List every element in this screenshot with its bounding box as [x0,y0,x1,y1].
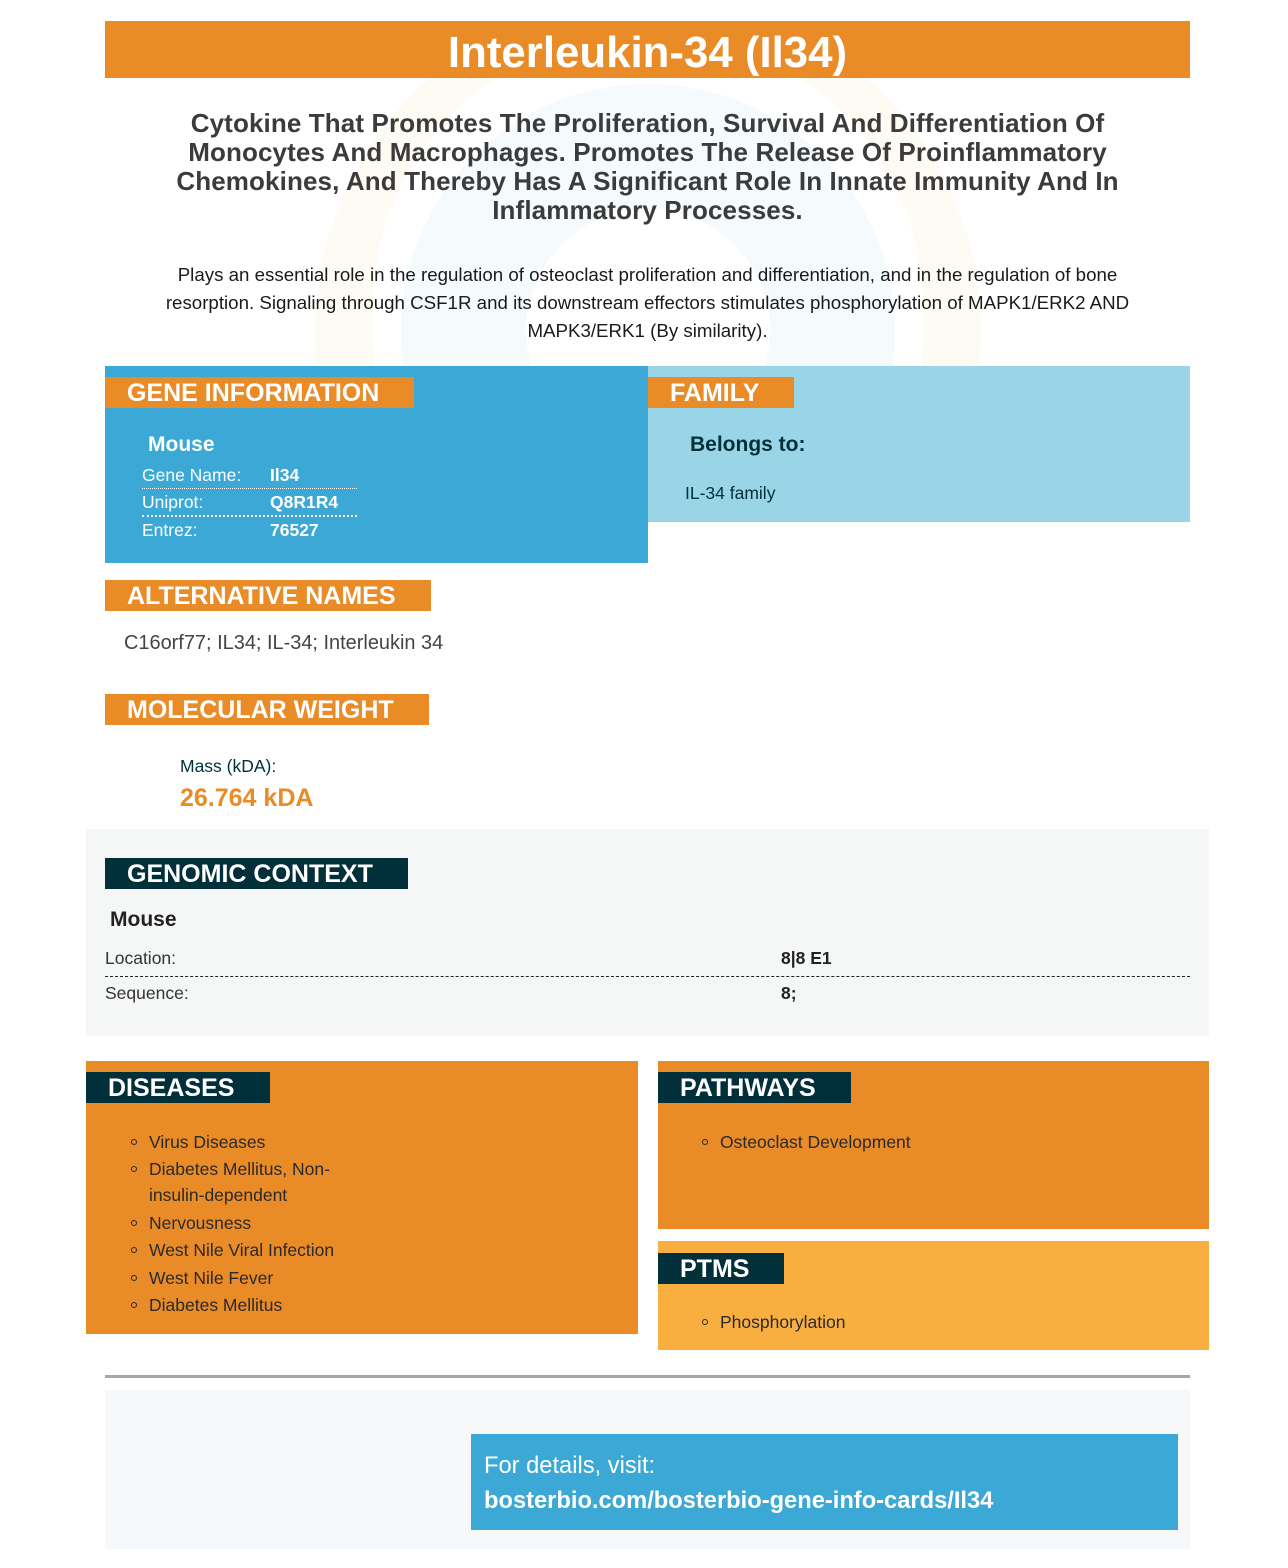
location row: Location: [105,948,176,968]
diseases list: West Nile Fever [149,1268,273,1288]
diseases list: West Nile Viral Infection [149,1240,334,1260]
ptms list: Phosphorylation [720,1312,846,1332]
sequence row: 8; [781,983,797,1003]
gene details table: Il34 [270,465,299,485]
summary heading: Inflammatory Processes. [492,195,803,225]
diseases list [131,1132,334,1315]
panel: family [648,366,1190,522]
heading: alternative names: ALTERNATIVE NAMES [127,582,396,610]
panel: pathways [658,1061,1209,1229]
panel: genomic context [86,829,1209,1036]
gene details table: Entrez: [142,520,197,540]
description text [166,264,1129,341]
description text: resorption. Signaling through CSF1R and its downstream effectors stimulates phosphorylation of MAPK1/ERK2 AND [166,292,1129,313]
gene details table: Q8R1R4 [270,492,338,512]
sequence row: Sequence: [105,983,189,1003]
summary heading: Cytokine That Promotes The Proliferation, Survival And Differentiation Of [191,108,1104,138]
alternative names text: C16orf77; IL34; IL-34; Interleukin 34 [124,632,443,654]
heading: family [648,377,794,408]
callout label: For details, visit: [484,1453,655,1479]
heading: family: FAMILY [670,379,759,407]
heading: gene information: GENE INFORMATION [127,379,379,407]
panel: footer [105,1390,1190,1549]
title banner [105,21,1190,78]
heading: pathways [658,1072,851,1103]
background watermark logo [315,78,981,366]
diseases list: Virus Diseases [149,1132,265,1152]
callout: details link [471,1434,1178,1530]
heading: diseases [86,1072,270,1103]
family value: IL-34 family [685,483,775,503]
gene details table: 76527 [270,520,319,540]
species label: Mouse [110,908,177,931]
panel: ptms [658,1241,1209,1350]
heading: genomic context: GENOMIC CONTEXT [127,860,373,888]
heading: molecular weight: MOLECULAR WEIGHT [127,696,394,724]
gene details table [142,465,357,540]
mass value: 26.764 kDA [180,784,313,812]
heading: diseases: DISEASES [108,1074,234,1102]
diseases list: Diabetes Mellitus [149,1295,282,1315]
title banner: Interleukin-34 (Il34) [448,28,847,77]
summary heading: Monocytes And Macrophages. Promotes The Release Of Proinflammatory [188,137,1107,167]
sequence row [105,983,797,1003]
heading: pathways: PATHWAYS [680,1074,816,1102]
description text: MAPK3/ERK1 (By similarity). [527,320,768,341]
panel: gene information [105,366,648,563]
gene details table: Uniprot: [142,492,203,512]
diseases list: Diabetes Mellitus, Non- [149,1159,330,1179]
callout url: bosterbio.com/bosterbio-gene-info-cards/Il34 [484,1488,993,1514]
location row: 8|8 E1 [781,948,832,968]
description text: Plays an essential role in the regulation of osteoclast proliferation and differentiation, and in the regulation of bone [178,264,1117,285]
summary heading [176,108,1119,225]
diseases list: insulin-dependent [149,1185,287,1205]
mass label: Mass (kDA): [180,756,276,776]
summary heading: Chemokines, And Thereby Has A Significant Role In Innate Immunity And In [176,166,1119,196]
heading: ptms [658,1253,784,1284]
panel: diseases [86,1061,638,1334]
species label: Mouse [148,433,215,456]
gene details table: Gene Name: [142,465,241,485]
location row [105,944,1190,977]
pathways list: Osteoclast Development [720,1132,911,1152]
heading: ptms: PTMS [680,1255,749,1283]
diseases list: Nervousness [149,1213,251,1233]
belongs to label: Belongs to: [690,433,806,456]
